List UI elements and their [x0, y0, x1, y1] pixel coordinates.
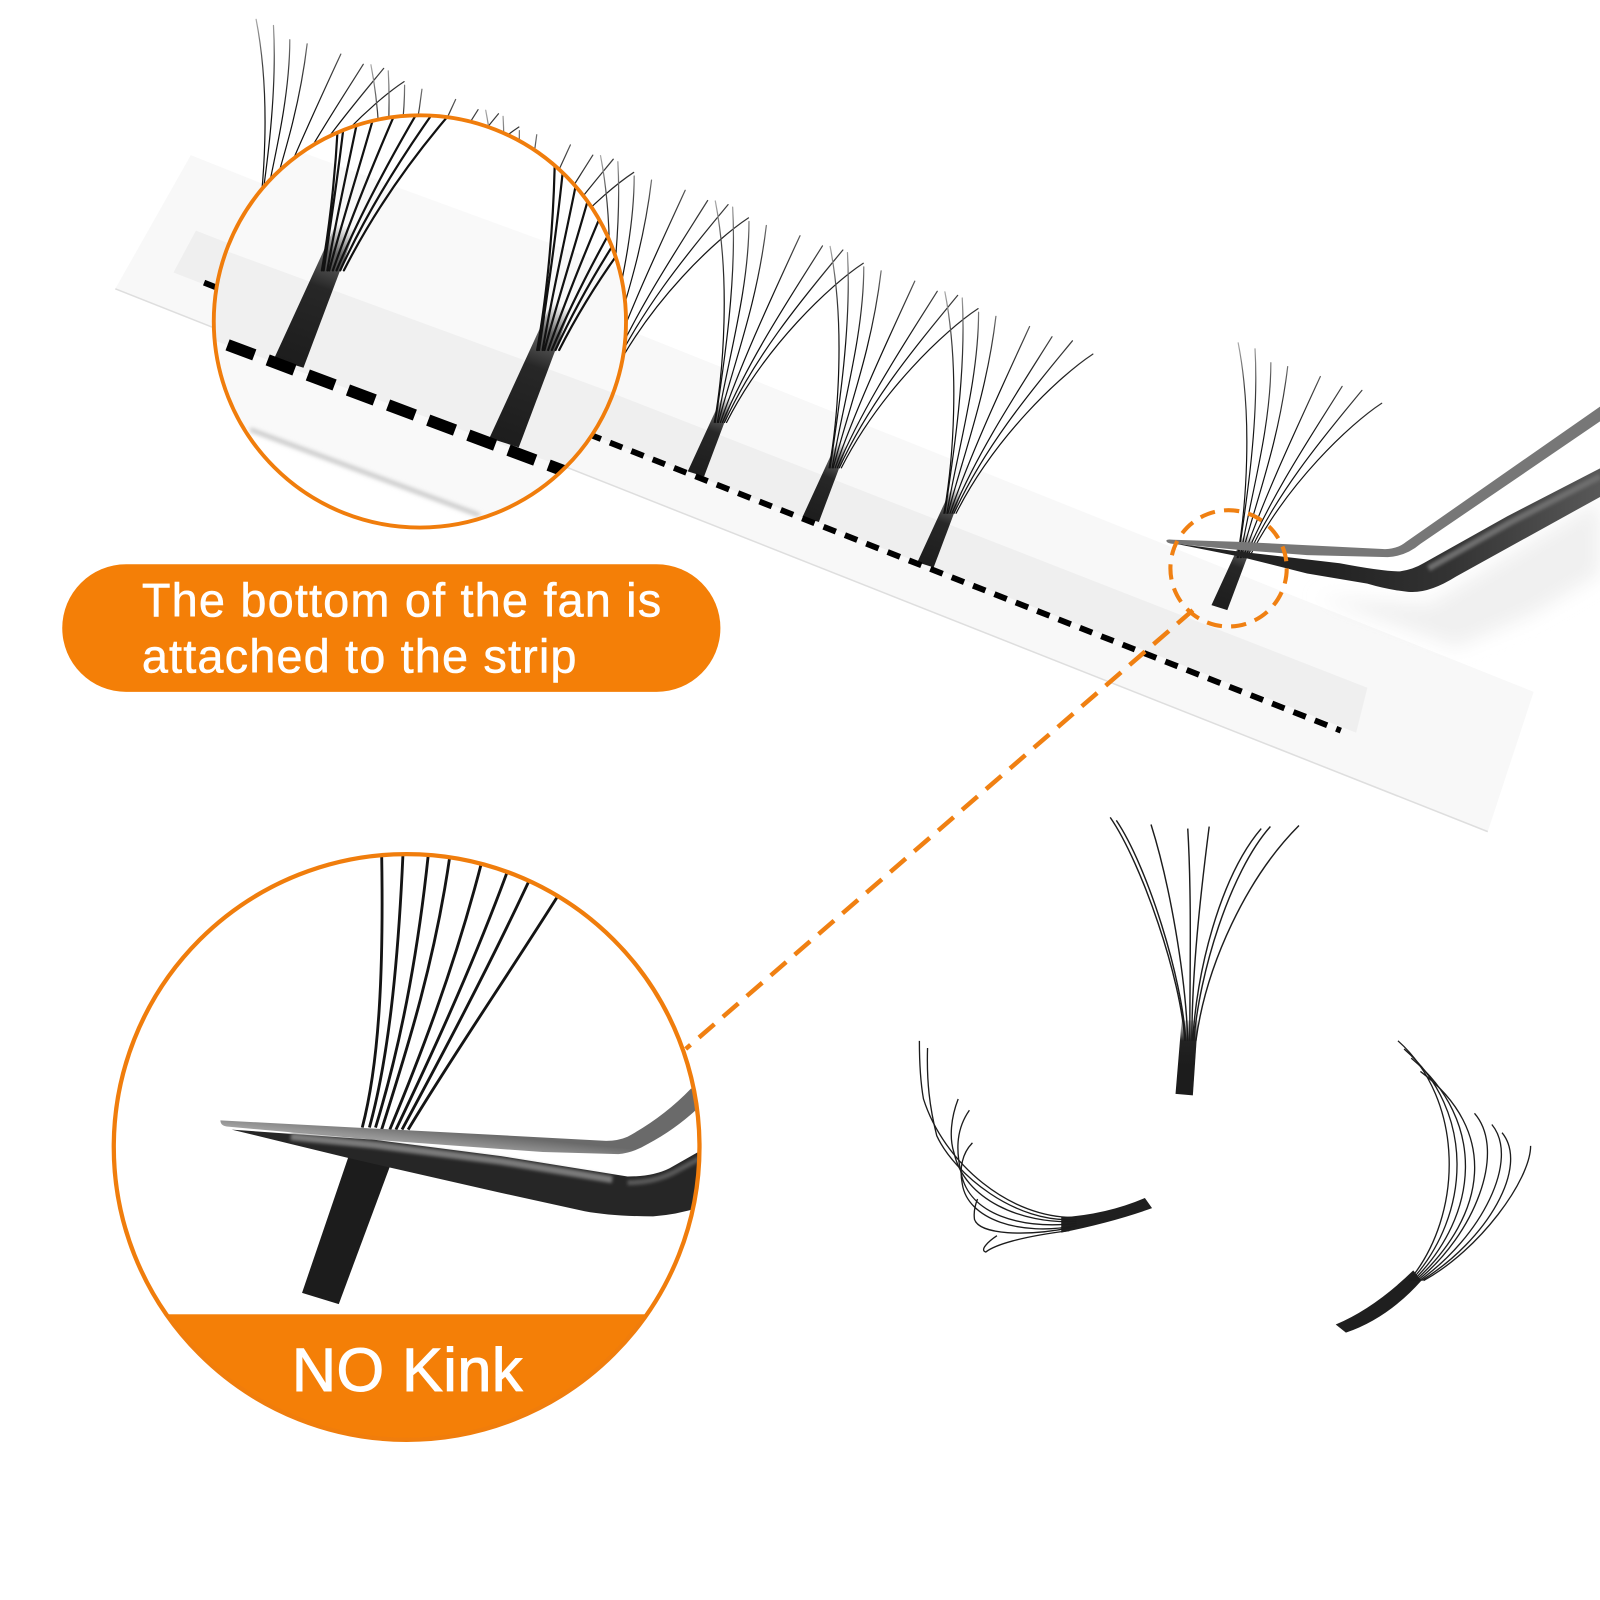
callout: fan bottom attached to strip: The bottom of the fan is [142, 574, 661, 626]
row of lash fans on the strip [229, 19, 1093, 567]
orange label band [168, 1314, 644, 1438]
dashed focus circle around the fan base [1170, 510, 1287, 627]
callout: fan bottom attached to strip: attached to the strip [142, 630, 577, 682]
magnified lash base [302, 1155, 392, 1304]
icon: tweezers [1166, 407, 1600, 592]
loose lash fan: curled right [1336, 1041, 1531, 1333]
loose lash fan: upright [1110, 817, 1299, 1095]
magnified tweezers [220, 1082, 714, 1216]
heading: NO Kink: NO Kink [292, 1336, 523, 1404]
panel: NO Kink magnified circle [102, 852, 714, 1447]
loose lash fan: curled left [919, 1041, 1152, 1252]
magnified lashes [362, 852, 559, 1130]
dashed strip line [204, 283, 1341, 731]
panel: paper strip holding the fans [115, 155, 1534, 832]
callout: fan bottom attached to strip [62, 564, 720, 692]
arrow: dashed connector to the NO Kink circle [686, 610, 1193, 1049]
lash fan held by tweezers [1211, 343, 1382, 610]
magnified strip dashes [228, 345, 582, 478]
magnified fan right [490, 167, 615, 448]
magnified fan left [275, 117, 447, 368]
shadow of tweezers on the paper [1316, 500, 1600, 647]
panel: magnified strip circle [212, 113, 628, 530]
